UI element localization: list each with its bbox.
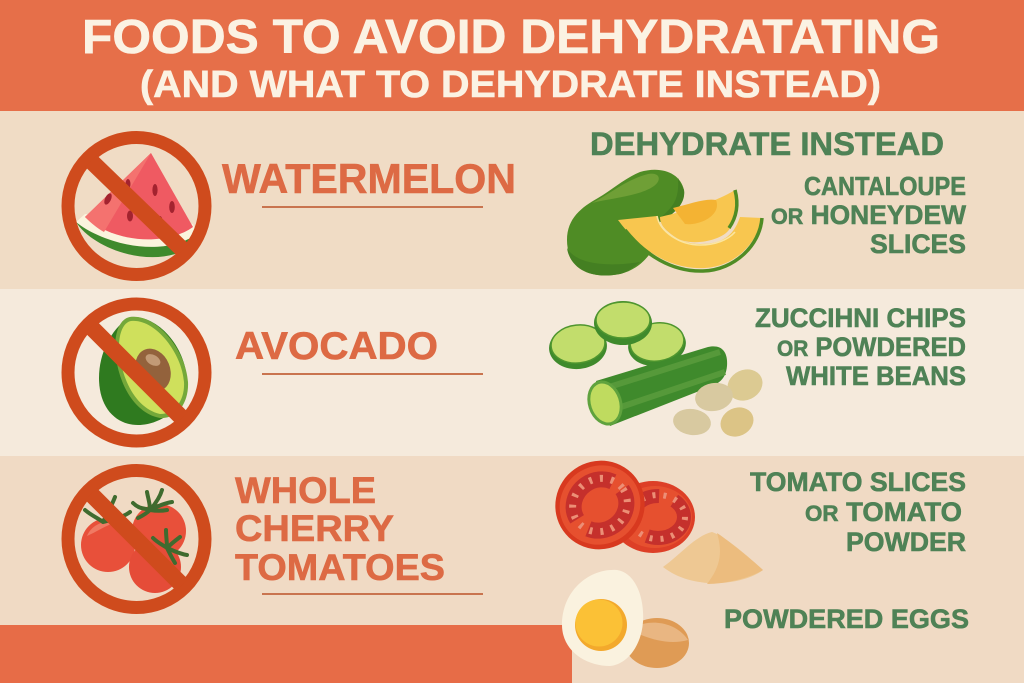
text: cantaloupe or honeydew slices — [771, 171, 966, 259]
text: zuccihni chips or powdered white beans — [755, 303, 966, 391]
icon: watermelon with prohibition sign — [68, 138, 205, 274]
label: whole cherry tomatoes: TOMATOES — [235, 547, 445, 588]
icon: cherry tomatoes with prohibition sign — [68, 470, 205, 608]
text: tomato slices or tomato powder: TOMATO SLICES — [750, 467, 966, 497]
panel: watermelon row — [68, 138, 516, 274]
text: powdered eggs: POWDERED EGGS — [724, 604, 969, 634]
text: cantaloupe or honeydew slices: CANTALOUPE — [804, 171, 966, 201]
underline — [262, 593, 483, 595]
label: watermelon: WATERMELON — [222, 155, 516, 202]
underline — [262, 206, 483, 208]
text: zuccihni chips or powdered white beans: OR POWDERED — [777, 332, 966, 362]
text: cantaloupe or honeydew slices: SLICES — [870, 229, 966, 259]
footer block — [0, 625, 572, 683]
text: zuccihni chips or powdered white beans: ZUCCIHNI CHIPS — [755, 303, 966, 333]
panel: cherry tomatoes row — [68, 470, 483, 608]
illustration: melon and cantaloupe slices — [567, 170, 762, 276]
title: FOODS TO AVOID DEHYDRATATING — [82, 11, 940, 64]
panel: avocado row — [68, 304, 483, 441]
label: whole cherry tomatoes — [235, 470, 445, 588]
illustration: egg — [562, 570, 689, 668]
illustration: tomato slices and powder — [538, 443, 763, 584]
title: (AND WHAT TO DEHYDRATE INSTEAD) — [140, 64, 881, 106]
text: tomato slices or tomato powder: OR TOMATO — [805, 497, 962, 527]
label: whole cherry tomatoes: WHOLE — [235, 470, 376, 511]
heading: dehydrate instead: DEHYDRATE INSTEAD — [590, 126, 944, 162]
header banner — [0, 0, 1024, 111]
text: tomato slices or tomato powder: POWDER — [846, 527, 966, 557]
text: cantaloupe or honeydew slices: OR HONEYDEW — [771, 200, 966, 230]
text: zuccihni chips or powdered white beans: WHITE BEANS — [786, 361, 966, 391]
label: whole cherry tomatoes: CHERRY — [235, 508, 394, 549]
text: tomato slices or tomato powder — [750, 467, 966, 557]
icon: avocado with prohibition sign — [68, 304, 205, 441]
label: avocado: AVOCADO — [235, 325, 438, 368]
underline — [262, 373, 483, 375]
illustration: zucchini and white beans — [547, 301, 768, 442]
title — [82, 11, 940, 106]
